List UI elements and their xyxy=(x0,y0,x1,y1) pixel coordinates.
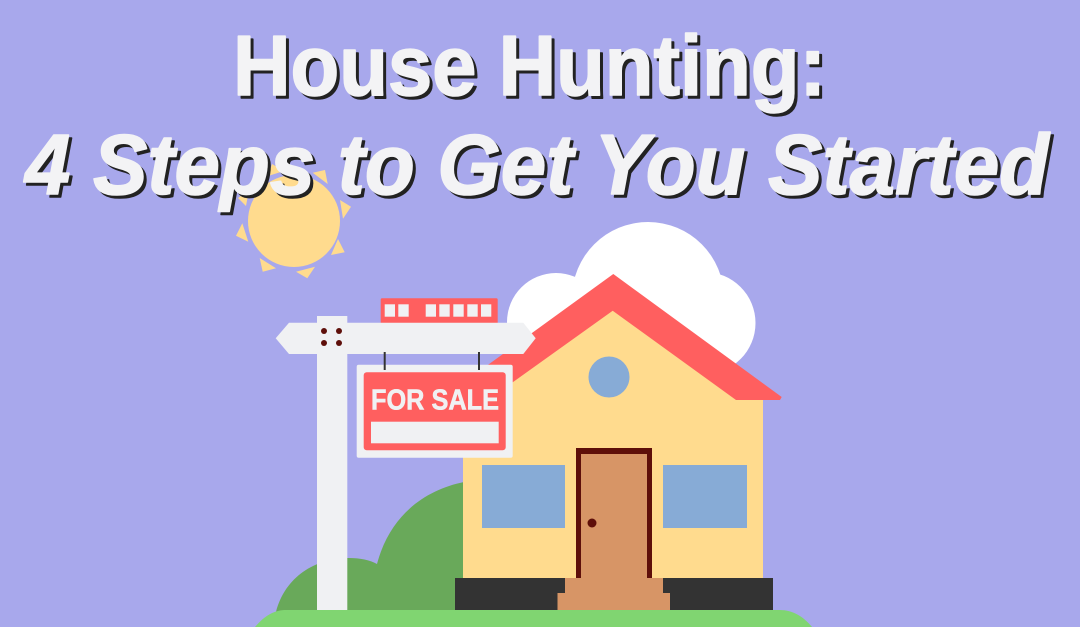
sign arm xyxy=(276,323,536,354)
door frame xyxy=(576,448,652,579)
grass xyxy=(255,610,812,627)
sign board: FOR SALE xyxy=(371,384,499,416)
title: 4 Steps to Get You Started xyxy=(26,121,1054,216)
bolts xyxy=(321,328,342,346)
roof xyxy=(445,274,782,400)
steps xyxy=(558,578,670,610)
door knob xyxy=(588,518,596,528)
door xyxy=(581,454,647,579)
hangers xyxy=(385,352,479,370)
title: House Hunting: xyxy=(233,19,826,114)
left window xyxy=(482,465,565,528)
round window xyxy=(588,356,630,398)
icon: cloud xyxy=(507,222,756,380)
for sale sign xyxy=(276,298,536,611)
title: House Hunting: xyxy=(236,22,829,117)
sign top rider xyxy=(381,298,498,324)
icon: sun xyxy=(236,164,351,278)
foundation xyxy=(455,578,773,610)
title xyxy=(23,19,1054,216)
sign post xyxy=(317,316,347,611)
bushes xyxy=(276,482,464,612)
right window xyxy=(663,465,747,528)
sign board xyxy=(357,365,513,458)
title: 4 Steps to Get You Started xyxy=(23,118,1051,213)
house xyxy=(445,274,782,610)
house wall xyxy=(463,300,763,580)
